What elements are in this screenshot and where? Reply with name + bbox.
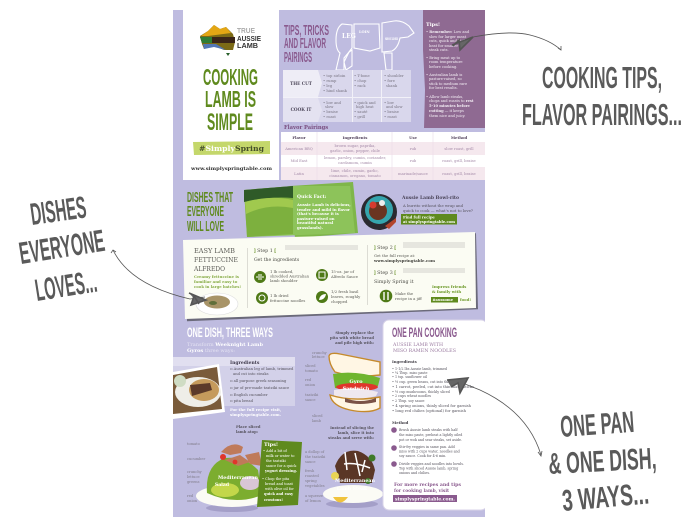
steak instruction (328, 426, 375, 440)
photo: green pasture (244, 186, 293, 237)
subheading: MISO RAMEN NOODLES (393, 349, 456, 354)
annotation: one pan and one dish (548, 406, 657, 518)
annotation: cooking tips (522, 60, 682, 132)
illustration: lamb steak plate: Mediterranean (335, 478, 376, 484)
table: flavor pairings: roast, grill, braise (442, 159, 476, 163)
table: the cut and cook it: THE CUT (290, 81, 313, 86)
steak labels (304, 450, 326, 503)
panel: tips, tricks and flavor pairings: TIPS, TRICKS (284, 22, 329, 39)
ingredients list: • ¼ Tbsp. miso paste (392, 370, 427, 375)
table: flavor pairings: American BBQ (284, 147, 313, 151)
hashtag banner (193, 141, 270, 155)
panel: tips: steak cuts. (429, 48, 449, 52)
table: flavor pairings: marinade/sauce (398, 172, 428, 176)
step 2: Get the full recipe at: (374, 253, 415, 258)
panel: tips: stick to medium rare (429, 82, 467, 86)
table: flavor pairings: roast, grill, braise (442, 172, 476, 176)
icon: lamb cuts diagram (336, 21, 414, 70)
ingredients band: simplyspringtable.com. (230, 412, 282, 417)
hashtag banner: #Simply Spring (199, 144, 264, 153)
table: flavor pairings: cinnamon, oregano, tomato (329, 174, 381, 178)
ingredients band (173, 357, 295, 417)
illustration: lamb salad: Salad (215, 482, 230, 488)
table: the cut and cook it (283, 70, 411, 122)
table: the cut and cook it: • braise (384, 110, 399, 114)
callout: tips: milk or water to (266, 454, 295, 458)
panel: title and logo (183, 10, 279, 180)
ingredients list (392, 359, 474, 413)
salad instruction: Place sliced (236, 425, 261, 429)
step 1: fettuccine noodles (270, 298, 305, 303)
illustration: gyro sandwich: Sandwich (343, 386, 370, 392)
ingredients list: • 2 cups wheat noodles (392, 394, 431, 398)
icon: fork and knife (380, 290, 392, 302)
arrow: cooking tips (452, 33, 561, 50)
table: the cut and cook it: slow (325, 105, 334, 109)
table: flavor pairings: rub (410, 159, 417, 163)
illustration: lamb steak plate (323, 451, 383, 508)
step 3: #aussome (432, 298, 454, 302)
ingredients list: • ½ cup. green beans, cut into thirds (392, 380, 454, 384)
step 1: lamb shoulder (270, 278, 298, 283)
table: flavor pairings: Flavor (292, 135, 307, 140)
steak labels: fresh (305, 469, 315, 473)
recipe link box: Find full recipe (403, 216, 435, 220)
salad labels: tomato (187, 442, 200, 446)
title: Cooking Lamb is Simple: LAMB IS (205, 86, 256, 112)
method steps: soy sauce. Cook for 4-6 min. (399, 454, 446, 458)
icon: True Aussie Lamb logo: TRUE (237, 28, 255, 35)
table: flavor pairings: Flavor Pairings (284, 125, 328, 131)
ingredients list: • 1 carrot, peeled, cut into thin matchsticks (392, 385, 474, 389)
sandwich labels: red (305, 378, 312, 382)
table: the cut and cook it: COOK IT (291, 107, 312, 112)
annotation: dishes everyone loves: EVERYONE (17, 223, 107, 271)
callout: tips: bread and toast (265, 482, 294, 486)
heading: PAIRINGS (284, 49, 312, 66)
sandwich instruction (330, 331, 375, 345)
step 1: 1 lb cooked, (270, 269, 293, 274)
callout: tips: quick and easy (264, 492, 294, 496)
illustration: lamb steak plate: Lamb Steak (337, 486, 368, 492)
panel: tips: room temperature (429, 60, 462, 64)
table: flavor pairings: Mid East (291, 159, 308, 163)
heading: dishes that everyone will love: WILL LOVE (187, 218, 224, 235)
step 2: ] Step 2 [ (374, 245, 396, 251)
illustration: gyro sandwich: Gyro (349, 379, 363, 385)
table: the cut and cook it: • roast (323, 115, 336, 119)
callout: tips: sauce for a quick (266, 464, 297, 468)
panel: one pan cooking (383, 318, 490, 513)
callout: tips (257, 440, 302, 507)
panel: Aussie Lamb Bowl-rito (361, 194, 473, 230)
salad labels: crunchy (187, 470, 203, 474)
recipe heading: cook in large batches! (194, 284, 241, 289)
title: Cooking Lamb is Simple (203, 64, 258, 136)
table: the cut and cook it: • rack (354, 84, 366, 88)
method steps: Brush Aussie lamb steaks with half (399, 428, 458, 432)
salad labels: greens (187, 480, 200, 484)
table: the cut and cook it: • roast (384, 115, 397, 119)
panel: quick fact: beautiful natural (297, 220, 334, 225)
callout: tips: with olive oil for (265, 487, 294, 491)
salad labels: cucumber (187, 457, 205, 461)
panel: tips, tricks and flavor pairings: AND FLAVOR (284, 35, 326, 52)
method steps: Divide veggies and noodles into bowls. (399, 462, 464, 466)
ingredients list: • 4 spring onions, thinly sliced for garnish (392, 404, 472, 408)
icon: True Aussie Lamb logo: AUSSIE (237, 34, 261, 43)
panel: easy lamb fettuccine alfredo (183, 232, 478, 321)
sandwich labels: lettuce (312, 355, 325, 359)
step 1 (254, 245, 361, 304)
salad instruction (236, 425, 261, 434)
panel: quick fact: tender and mild in flavor (297, 207, 351, 212)
panel: one pan cooking: ONE PAN COOKING (392, 324, 457, 340)
sandwich labels: onion (305, 383, 316, 387)
subheading: Gyros three ways: (187, 348, 235, 354)
ingredients list: • ½ cup mushrooms, thickly sliced (392, 390, 451, 394)
table: the cut and cook it: • braise (323, 110, 338, 114)
method steps: pot or wok and sear steaks, set aside. (399, 438, 462, 442)
recipe link box: at simplyspringtable.com (403, 220, 455, 224)
method steps: onions and chilies. (399, 471, 430, 475)
icon: lamb cuts diagram: SHOULDER (385, 37, 398, 41)
panel: tips: pasture-raised, so (429, 77, 462, 81)
ingredients band: ▫ all purpose greek seasoning (230, 379, 287, 383)
table: flavor pairings: garlic, onion, pepper, chile (330, 149, 380, 153)
step 1: Get the ingredients (254, 257, 300, 263)
step 3: Impress friends (432, 284, 467, 289)
icon: lamb cuts diagram: LEG (342, 33, 356, 40)
panel: tips: • Allow lamb steaks, (426, 95, 463, 99)
panel: quick fact: pasture-raised on (297, 216, 335, 221)
step 1: chopped (331, 299, 348, 304)
panel: tips (423, 10, 485, 128)
method steps: Top with sliced Aussie lamb, spring (399, 466, 459, 470)
sandwich labels: sliced (305, 364, 316, 368)
step 1: Alfredo Sauce (330, 274, 359, 279)
arrow: one pan (447, 378, 542, 456)
annotation: dishes everyone loves (17, 189, 107, 308)
panel: Aussie Lamb Bowl-rito: Aussie Lamb Bowl-rito (401, 195, 460, 201)
sandwich labels: crunchy (312, 351, 328, 355)
more recipes link: simplyspringtable.com. (395, 496, 456, 502)
panel: tips: for best results. (429, 86, 458, 90)
illustration: lamb salad (196, 444, 268, 512)
recipe heading (193, 248, 241, 289)
table: flavor pairings: slow roast, grill (444, 147, 474, 151)
ingredients list: Ingredients (392, 359, 417, 364)
ingredients list: • 2 Tbsp. soy sauce (392, 399, 425, 403)
salad labels: red (187, 494, 194, 498)
steak labels: sauce (305, 460, 315, 464)
salad instruction: lamb atop: (236, 430, 259, 434)
sandwich labels: lamb (312, 419, 322, 423)
sandwich labels: sauce (305, 398, 315, 402)
salad labels: onion (187, 499, 198, 503)
recipe heading: ALFREDO (193, 266, 225, 273)
panel: one dish, three ways (173, 324, 383, 512)
salad labels (187, 442, 205, 503)
sandwich labels: tomato (305, 369, 318, 373)
subheading: Transform Weeknight Lamb (187, 342, 264, 348)
steak labels: of lemon (305, 499, 321, 503)
ingredients band: ▫ jar of pre-made tzatziki sauce (230, 386, 289, 390)
annotation: dishes everyone loves: DISHES (28, 189, 88, 232)
table: flavor pairings: Method (451, 135, 468, 140)
website url: www.simplyspringtable.com (190, 166, 273, 172)
table: the cut and cook it: • rump (323, 79, 337, 83)
table: flavor pairings (281, 125, 485, 180)
panel: tips: slow for larger meat (429, 35, 467, 39)
panel: tips: chops and roasts to rest (429, 99, 474, 103)
step 3: & family with (432, 289, 461, 294)
ingredients band: Ingredients (230, 360, 260, 366)
salad labels: lettuce (187, 475, 200, 479)
table: the cut and cook it: • hind shank (323, 89, 348, 93)
photo: gyro plate (173, 364, 225, 419)
more recipes link (393, 483, 462, 502)
heading: ONE DISH, THREE WAYS (187, 324, 273, 340)
icon: lamb cuts diagram: LOIN (359, 30, 370, 34)
table: the cut and cook it: and slow (386, 105, 403, 109)
sandwich instruction: Simply replace the (335, 331, 375, 335)
sandwich instruction: pita with white bread (330, 336, 374, 340)
steak instruction: Instead of slicing the (330, 426, 375, 430)
title: Cooking Lamb is Simple: SIMPLE (207, 109, 253, 136)
table: flavor pairings: Use (409, 135, 418, 140)
table: flavor pairings: rub (410, 147, 417, 151)
callout: tips: yogurt dressing. (264, 469, 297, 473)
table: flavor pairings: brown sugar, paprika, (334, 144, 376, 148)
table: the cut and cook it: • T-bone (354, 74, 370, 78)
annotation: dishes everyone loves: LOVES... (33, 264, 99, 308)
subheading (392, 343, 456, 354)
table: the cut and cook it: • top sirloin (323, 74, 346, 78)
panel: quick fact: Aussie Lamb is delicious, (296, 202, 351, 207)
panel: Aussie Lamb Bowl-rito: quick to cook — what's not to love? (403, 209, 473, 213)
ingredients band: and cut into steaks (233, 372, 269, 376)
recipe heading: Creamy fettuccine is (194, 274, 240, 279)
panel: tips: 5-10 minutes before (429, 104, 470, 108)
panel: tips, tricks and flavor pairings (281, 10, 485, 180)
panel: quick fact (244, 182, 358, 238)
callout: tips: the tzatziki (266, 459, 287, 463)
panel: quick fact: Quick Fact: (297, 194, 327, 200)
subheading (187, 342, 264, 354)
panel: tips: Tips! (426, 22, 440, 28)
step 2 (373, 242, 465, 263)
table: flavor pairings: Latin (294, 172, 304, 176)
icons: ingredients (254, 269, 328, 304)
ingredients list: • long red chilies (optional) for garnish (392, 409, 467, 413)
icon: True Aussie Lamb logo: LAMB (237, 41, 259, 50)
method steps: Stir-fry veggies in same pan. Add (399, 445, 456, 449)
text: DISHES THAT (187, 189, 233, 206)
photo: fettuccine plate (196, 293, 238, 315)
recipe heading: EASY LAMB (194, 248, 236, 255)
table: the cut and cook it: • sauté (354, 110, 367, 114)
recipe link box (401, 214, 457, 224)
subheading: AUSSIE LAMB WITH (392, 343, 443, 348)
panel: tips: cutting — it keeps (429, 109, 464, 113)
more recipes link: For more recipes and tips (394, 483, 462, 488)
step 3: Simply Spring it (374, 279, 414, 285)
poster background (173, 10, 485, 517)
steak labels: spring (305, 479, 317, 483)
ingredients list: • 1 tsp. sunflower oil (392, 375, 427, 379)
method steps: Method (392, 420, 409, 425)
table: the cut and cook it: • low and (323, 101, 342, 105)
table: flavor pairings: lime, chile, cumin, garlic, (331, 169, 379, 173)
table: flavor pairings: lemon, parsley, cumin, coriander, (324, 156, 386, 160)
steak labels: a squeeze (305, 494, 323, 498)
panel: tips: • Remember: Low and (426, 30, 470, 34)
step 3: recipe in a jiff (395, 296, 422, 301)
callout: tips: • Add a bit of (263, 449, 287, 453)
table: the cut and cook it: • leg (323, 84, 333, 88)
step 1: leaves, roughly (331, 294, 361, 299)
panel: quick fact: (that's because it is (297, 211, 339, 216)
icon: True Aussie Lamb logo (200, 25, 261, 56)
table: the cut and cook it: shank (386, 84, 398, 88)
table: flavor pairings: cardamom, cumin (338, 161, 372, 165)
ingredients list: • 1-1/2 lbs Aussie lamb, trimmed (392, 367, 448, 371)
step 1: 15-oz. jar of (331, 269, 355, 274)
title: Cooking Lamb is Simple: COOKING (203, 64, 258, 90)
steak labels: the tzatziki (305, 455, 326, 459)
table: the cut and cook it: • shoulder (384, 74, 404, 78)
ingredients band: ▫ English cucumber (230, 393, 268, 397)
table: the cut and cook it: high heat (356, 105, 374, 109)
method steps (391, 420, 464, 475)
sandwich labels: sliced (312, 414, 323, 418)
recipe heading: FETTUCCINE (194, 257, 238, 264)
photo: burrito bowl (361, 194, 397, 230)
ingredients band: For the full recipe visit, (230, 407, 281, 412)
sandwich instruction: and pile high with: (335, 341, 375, 345)
panel: tips: them nice and juicy. (429, 114, 466, 118)
table: the cut and cook it: • fore (384, 79, 395, 83)
step 1: ] Step 1 [ (254, 248, 276, 254)
table: flavor pairings: Ingredients (343, 135, 367, 140)
panel: Aussie Lamb Bowl-rito: A burrito without the wrap and (402, 204, 464, 208)
table: the cut and cook it: • grill (354, 115, 366, 119)
panel: tips: • Australian lamb is (426, 73, 463, 77)
panel: tips: heat for smaller (429, 44, 458, 48)
step 3: ] Step 3 [ (374, 270, 396, 276)
table: the cut and cook it: • chop (354, 79, 367, 83)
callout: tips: • Chop the pita (262, 477, 289, 481)
callout: tips: croutons! (264, 498, 283, 502)
panel: tips: • Bring meat up to (426, 56, 460, 60)
heading (284, 22, 329, 66)
steak instruction: lamb, slice it into (338, 431, 375, 435)
arrow: dishes (111, 250, 206, 305)
step 2: www.simplyspringtable.com (373, 258, 436, 263)
step 3 (374, 268, 471, 302)
more recipes link: for cooking lamb, visit (394, 489, 449, 494)
ingredients band: ▫ Australian leg of lamb, trimmed (230, 367, 294, 371)
steak labels: vegetables (304, 484, 325, 488)
method steps: the miso paste, preheat a lightly oiled (399, 433, 463, 437)
step 3: Make the (395, 291, 414, 296)
method steps: miso with 2 cups water, noodles and (399, 450, 461, 454)
sandwich labels (305, 351, 328, 423)
illustration: lamb salad: Mediterranean (218, 475, 259, 481)
ingredients band: ▫ pita bread (230, 399, 254, 403)
step 3: food! (460, 297, 471, 302)
steak instruction: steaks and serve with: (328, 436, 375, 440)
recipe heading: familiar and easy to (194, 279, 238, 284)
panel: tips: before cooking. (429, 65, 457, 69)
steak labels: a dollop of (305, 450, 325, 454)
callout: tips: Tips! (264, 442, 278, 448)
table: the cut and cook it: • low (384, 101, 395, 105)
panel: tips: cuts, quick and high (429, 39, 467, 43)
step 1: 1/2 fresh basil (331, 289, 359, 294)
illustration: gyro sandwich (329, 353, 380, 412)
sandwich labels: tzatziki (305, 393, 319, 397)
steak labels: roasted (305, 474, 319, 478)
heading: dishes that everyone will love (187, 189, 233, 235)
step 1: 1 lb dried (270, 293, 289, 298)
table: the cut and cook it: • quick and (354, 101, 376, 105)
step 1: shredded Australian (270, 274, 310, 278)
heading: dishes that everyone will love: EVERYONE (187, 203, 224, 220)
panel: quick fact: grasslands). (297, 225, 324, 230)
